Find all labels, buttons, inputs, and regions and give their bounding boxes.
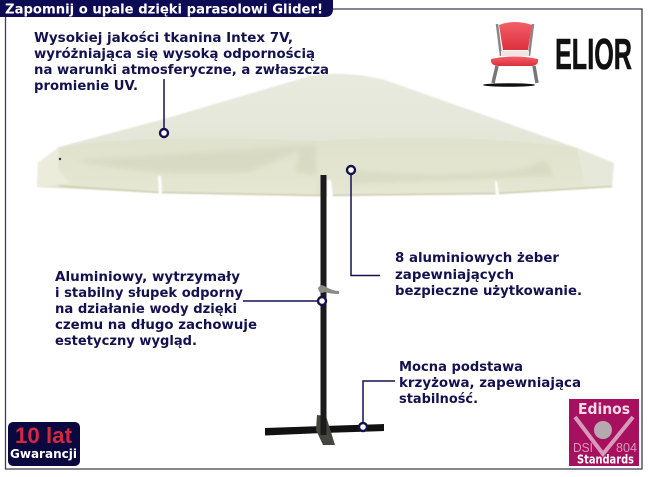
text: fabric description: wyróżniająca się wysoką odpornością [34,47,315,62]
text: ribs description: 8 aluminiowych żeber [395,251,560,266]
text: base description: Mocna podstawa [399,360,523,375]
badge: Edinos standards: Edinos [578,400,630,418]
text: pole description: estetyczny wygląd. [55,334,197,349]
badge: Edinos standards: 804 [616,440,637,455]
icon: chair [483,22,538,87]
callout: canopy fabric [34,31,334,137]
badge: Edinos standards [569,399,639,466]
pointer: base [359,381,395,431]
badge: 10 year warranty [8,422,80,466]
callout: base [359,360,586,431]
badge: 10 year warranty: Gwarancji [10,447,77,461]
text: ribs description: zapewniających [395,268,514,283]
text: base description: krzyżowa, zapewniająca [399,376,581,391]
text: pole description: Aluminiowy, wytrzymały [55,270,241,285]
umbrella photo [37,74,614,445]
badge: Edinos standards: Standards [577,452,634,466]
title bar: Zapomnij o upale dzięki parasolowi Glider! [5,2,323,18]
text: pole description: na działanie wody dzięki [55,302,237,317]
text: fabric description: Wysokiej jakości tkanina Intex 7V, [34,31,293,46]
pointer: ribs [347,166,380,276]
badge: Edinos standards: DSI [573,440,593,455]
text: fabric description: promienie UV. [34,79,138,94]
text: pole description: czemu na długo zachowuje [55,318,257,333]
umbrella canopy [37,74,614,197]
pole handle [318,285,339,294]
text: pole description: i stabilny słupek odporny [55,286,244,301]
pointer: pole [243,297,326,305]
text: ribs description: bezpieczne użytkowanie. [395,284,582,299]
text: fabric description: na warunki atmosferyczne, a zwłaszcza [34,63,329,78]
cross base [265,415,384,445]
badge: 10 year warranty: 10 lat [15,423,73,448]
umbrella pole [320,175,326,432]
pointer: fabric [160,79,168,137]
callout: ribs [347,166,582,299]
logo: Elior chair [483,22,632,87]
text: base description: stabilność. [399,392,478,407]
callout: pole [55,270,326,349]
